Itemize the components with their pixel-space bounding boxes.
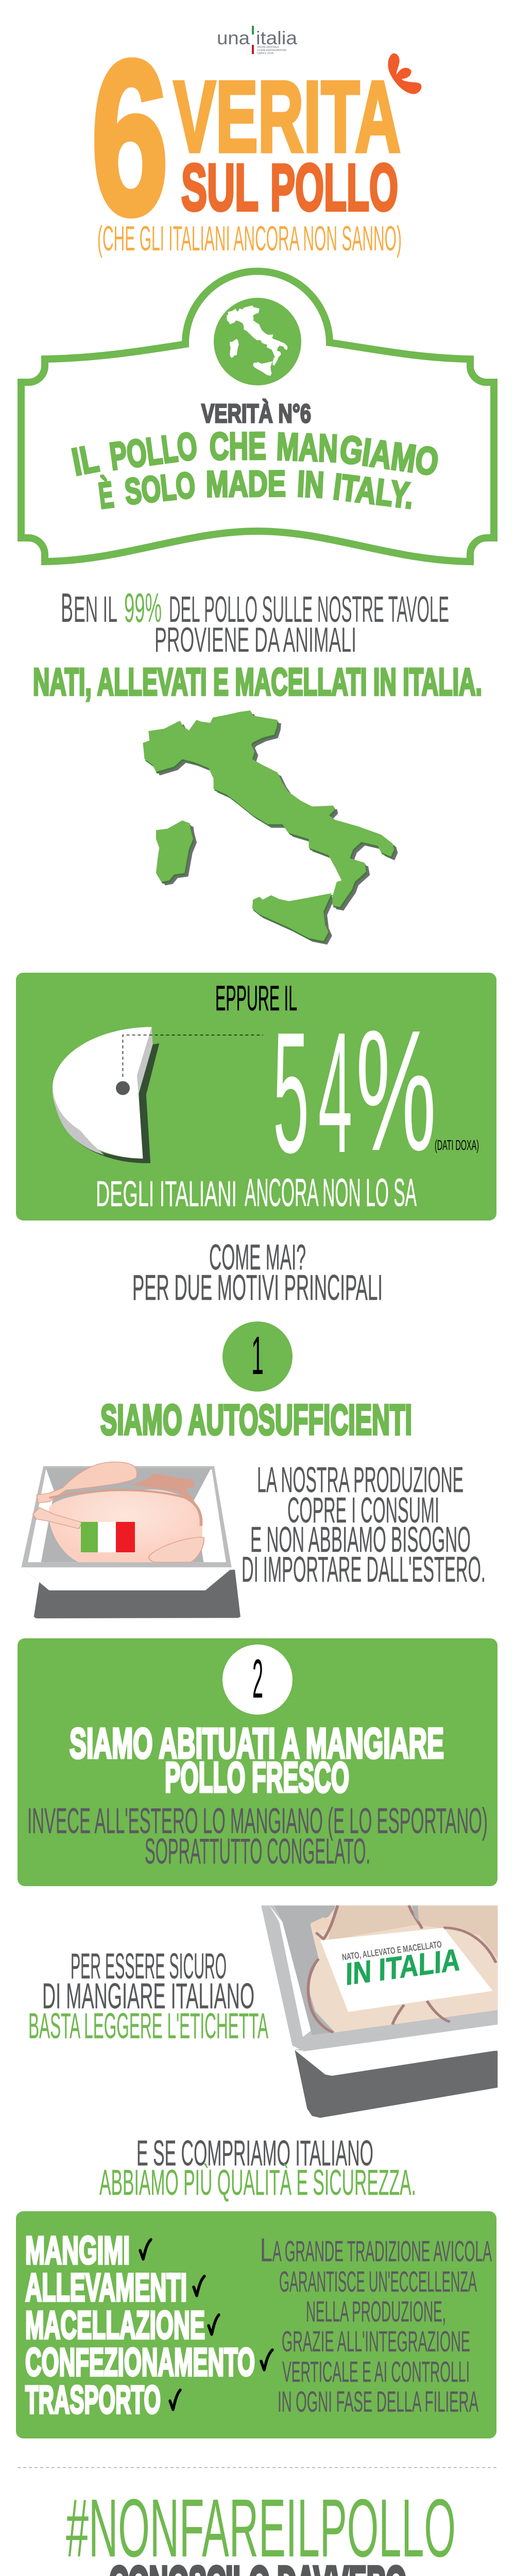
- heading: il pollo che mangiamo e solo made in italy: POLLO: [107, 423, 200, 478]
- list: mangimi allevamenti macellazione confezionamento trasporto: [25, 2229, 255, 2422]
- heading: il pollo che mangiamo e solo made in italy: MADE: [206, 464, 286, 505]
- heading: il pollo che mangiamo e solo made in italy: GIAMO: [337, 427, 441, 484]
- label text: in italia: IN ITALIA: [346, 1941, 460, 1992]
- logo: unaitalia: italia: [256, 27, 298, 48]
- badge: number 2: 2: [252, 1648, 263, 1709]
- illustration: chicken tray with flag: [21, 1462, 241, 1618]
- heading: il pollo che mangiamo e solo made in italy: ITALY.: [331, 466, 416, 517]
- text: come mai: [132, 1237, 383, 1308]
- label text: in italia: NATO, ALLEVATO E MACELLATO: [341, 1939, 442, 1962]
- title: 6 verita sul pollo: POLLO: [270, 151, 398, 225]
- heading: il pollo che mangiamo e solo made in italy: È: [96, 474, 116, 517]
- list: mangimi allevamenti macellazione confezionamento trasporto: ALLEVAMENTI: [25, 2266, 187, 2310]
- text: per essere sicuro: PER ESSERE SICURO: [71, 1946, 227, 1986]
- illustration: tray with italia label: [261, 1905, 497, 2118]
- title: 6 verita sul pollo: SUL: [181, 151, 259, 225]
- number: 54%: 5: [273, 996, 309, 1189]
- logo: unaitalia: FILIERE AGROALIMENTARI: [257, 49, 286, 52]
- panel: eppure il 54%: [16, 973, 496, 1221]
- heading: siamo abituati a mangiare pollo fresco: [70, 1719, 444, 1801]
- text: la grande tradizione avicola: [260, 2231, 492, 2418]
- heading: il pollo che mangiamo e solo made in italy: IL: [68, 436, 102, 484]
- text block: ben il 99%: [61, 585, 449, 659]
- icon: orange splash: [388, 54, 421, 94]
- text: come mai: COME MAI?: [209, 1237, 306, 1277]
- text: invece all'estero: [27, 1801, 488, 1871]
- list: mangimi allevamenti macellazione confezionamento trasporto: TRASPORTO: [25, 2378, 161, 2422]
- panel: verita n6 badge frame: [21, 271, 494, 562]
- badge: number 1: 1: [251, 1326, 264, 1386]
- panel: pollo fresco: [18, 1638, 497, 1886]
- title: 6 verita sul pollo: [91, 15, 401, 260]
- title: 6 verita sul pollo: 6: [91, 15, 168, 260]
- heading: il pollo che mangiamo e solo made in italy: MAN: [276, 425, 338, 470]
- logo: unaitalia: [217, 26, 298, 55]
- number: 54%: 4: [318, 996, 352, 1189]
- text: per essere sicuro: DI MANGIARE ITALIANO: [42, 1976, 254, 2016]
- logo: unaitalia: una: [217, 27, 250, 48]
- heading: il pollo che mangiamo e solo made in italy: SOLO: [123, 465, 197, 513]
- heading: il pollo che mangiamo e solo made in italy: [68, 423, 441, 517]
- heading: il pollo che mangiamo e solo made in italy: CHE: [209, 424, 266, 468]
- list: mangimi allevamenti macellazione confezionamento trasporto: MANGIMI: [25, 2229, 130, 2273]
- panel: eppure il 54%: EPPURE IL: [215, 978, 297, 1018]
- panel: filiera checklist: [16, 2211, 496, 2438]
- badge: number 2: [222, 1645, 293, 1715]
- map: italy 3d: [143, 710, 398, 944]
- text block: ben il 99%: 99%: [124, 585, 162, 631]
- list: mangimi allevamenti macellazione confezionamento trasporto: MACELLAZIONE: [25, 2303, 205, 2347]
- text: per essere sicuro: [28, 1946, 268, 2046]
- badge: number 1: [222, 1321, 293, 1392]
- text: la grande tradizione avicola: L: [260, 2231, 272, 2268]
- icon: italy in circle: [214, 298, 301, 385]
- heading: verita n6: VERITÀ N°6: [201, 399, 311, 428]
- logo: unaitalia: UNIONE NAZIONALE: [257, 46, 280, 49]
- label sheet: [320, 1928, 493, 2012]
- text: e se compriamo italiano: [99, 2133, 416, 2202]
- text block: ben il 99%: B: [61, 585, 73, 631]
- list: mangimi allevamenti macellazione confezionamento trasporto: CONFEZIONAMENTO: [25, 2341, 255, 2384]
- logo: unaitalia: CARNI E UOVA: [257, 52, 274, 55]
- number: 54%: %: [356, 994, 436, 1187]
- chart: pie 54%: [53, 1027, 263, 1163]
- heading: siamo abituati a mangiare pollo fresco: POLLO FRESCO: [165, 1753, 349, 1801]
- heading: il pollo che mangiamo e solo made in italy: IN: [296, 464, 325, 506]
- text block: ben il 99%: EN IL: [74, 589, 117, 630]
- text: degli italiani ancora non lo sa: DEGLI ITALIANI: [96, 1174, 237, 1214]
- icon: check marks: [140, 2240, 272, 2410]
- text: la nostra produzione: [242, 1460, 486, 1589]
- number: 54%: [273, 994, 436, 1189]
- icon: italian flag: [81, 1522, 135, 1552]
